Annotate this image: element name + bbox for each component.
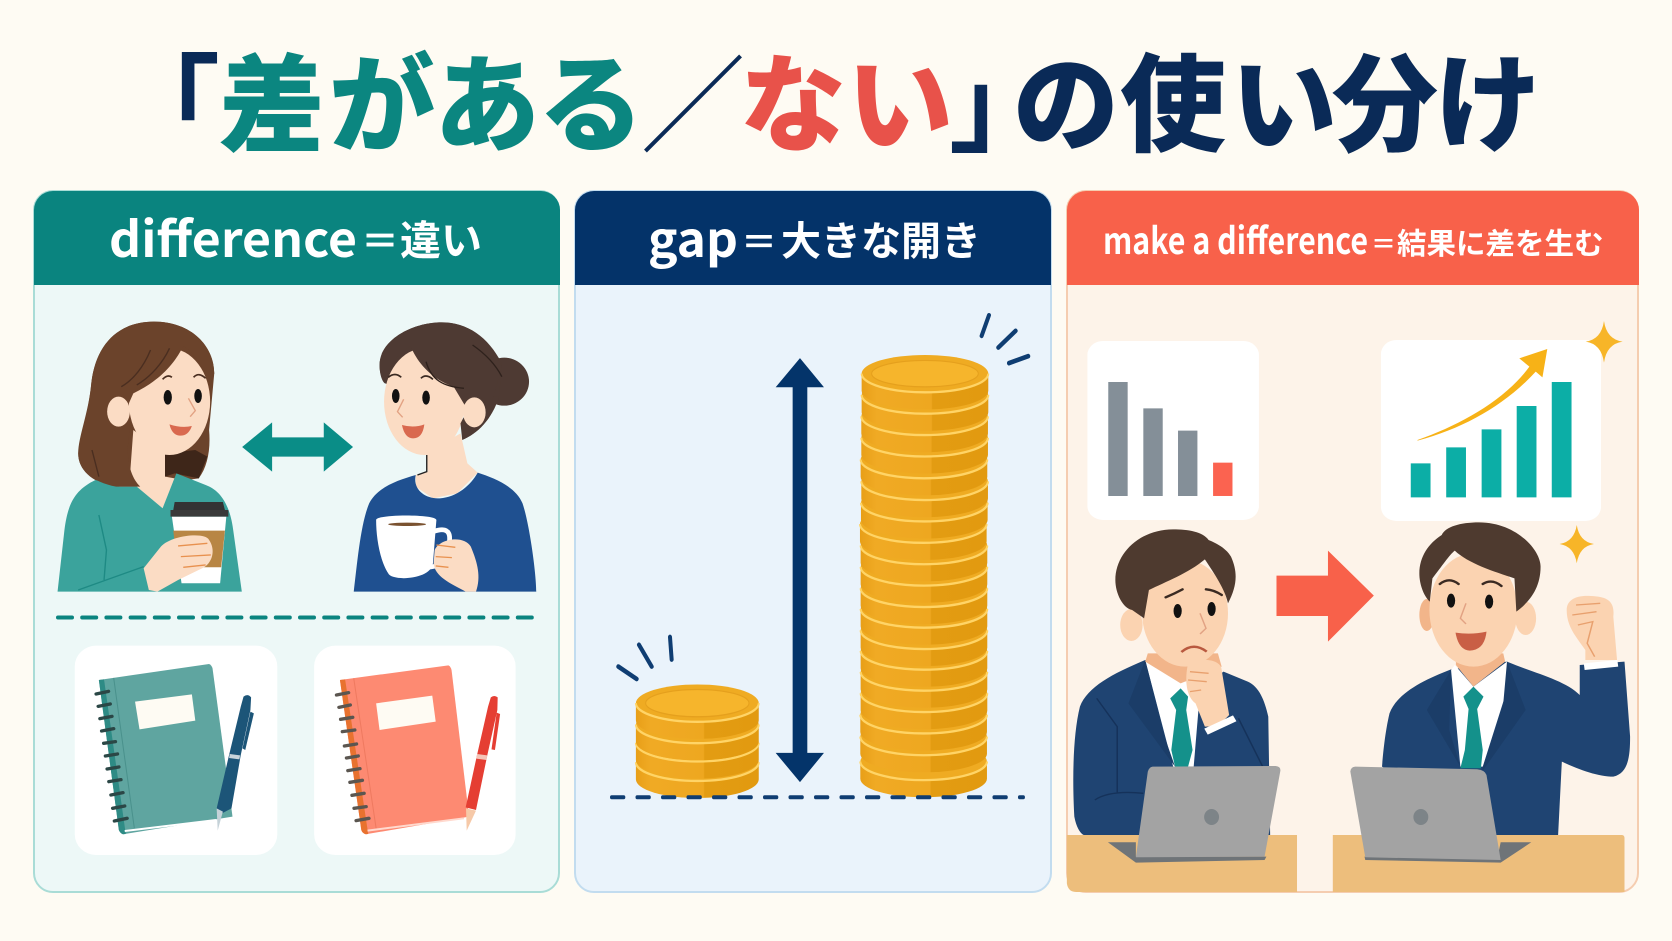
arrow: vertical gap — [776, 358, 824, 782]
panel header: difference — [34, 191, 560, 285]
charts: before and after — [1087, 321, 1623, 563]
notebook card: teal — [75, 646, 277, 855]
small coin stack — [636, 684, 759, 798]
emphasis ticks — [618, 315, 1028, 679]
tall coin stack — [860, 355, 988, 797]
illustration: businessmen at laptops — [1067, 522, 1630, 892]
chart: falling bars — [1087, 341, 1259, 520]
title: ない — [740, 20, 953, 174]
table left — [1067, 835, 1297, 892]
panel header: make a difference: 結果に差を生む — [1397, 221, 1604, 263]
panel header: make a difference: make a difference — [1103, 211, 1368, 265]
dashed divider — [58, 616, 536, 620]
chart: rising bars — [1381, 340, 1601, 521]
table right — [1333, 835, 1624, 892]
icon: double arrow — [242, 422, 353, 472]
panel header: difference: difference — [109, 201, 357, 272]
title: 」 — [949, 20, 1055, 174]
panel header: gap: 大きな開き — [781, 209, 981, 267]
panel header: gap: gap — [648, 201, 738, 272]
title: の使い分け — [1013, 20, 1541, 174]
title: 差がある — [219, 20, 644, 174]
icon: sparkle small — [1560, 525, 1594, 563]
panel: make a difference — [1067, 191, 1639, 892]
panel: difference — [34, 191, 560, 892]
laptop right — [1350, 767, 1531, 863]
happy man — [1382, 522, 1630, 835]
panel header: gap — [575, 191, 1051, 285]
chart: coin stacks and gap arrow — [612, 315, 1028, 798]
panel: gap — [575, 191, 1051, 892]
dashed baseline — [612, 792, 1023, 802]
woman with takeaway cup — [58, 322, 242, 592]
panel header: difference: ＝ — [361, 211, 399, 266]
icon: arrow right — [1276, 551, 1374, 642]
title — [114, 20, 1541, 175]
notebook card: coral — [314, 646, 516, 855]
woman with mug — [354, 322, 536, 592]
panel header: difference: 違い — [400, 207, 482, 267]
illustration: two women talking — [58, 322, 536, 592]
icon: sparkle large — [1586, 321, 1623, 363]
panel header: make a difference: ＝ — [1371, 225, 1396, 261]
worried man — [1073, 529, 1270, 835]
title: ／ — [640, 21, 746, 175]
laptop left — [1108, 766, 1280, 863]
panel header: gap: ＝ — [741, 214, 777, 266]
panel header: make a difference — [1067, 191, 1639, 285]
title: 「 — [114, 20, 220, 174]
illustration: notebooks — [75, 646, 516, 855]
